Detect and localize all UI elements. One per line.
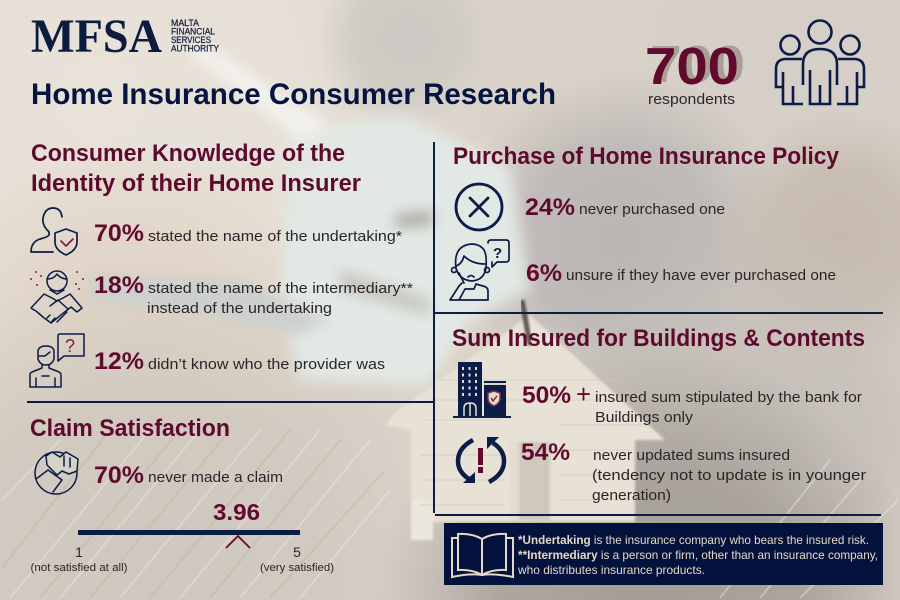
definitions text [517, 533, 878, 577]
scale low label [30, 544, 128, 574]
stat: 70% no claim: 70% [94, 462, 144, 489]
rating value: 3.96 [213, 499, 260, 525]
stat: 50% +: insured sum stipulated by the bank for [595, 389, 862, 406]
stat: 700 respondents: respondents [648, 91, 735, 108]
icon: handshake [31, 271, 82, 323]
icon: three people [776, 20, 864, 104]
stat: 54%: (tendency not to update is in younger [592, 467, 866, 484]
stat: 18%: 18% [94, 272, 144, 299]
heading: sum insured: Sum Insured for Buildings & Contents [452, 325, 865, 352]
heading: claim satisfaction: Claim Satisfaction [30, 415, 230, 442]
panel dividers [27, 142, 883, 516]
stat: 24%: 24% [525, 194, 575, 221]
scale marker [226, 536, 250, 548]
stat: 54%: never updated sums insured [593, 447, 790, 464]
panel: definitions [444, 523, 883, 585]
logo subtitle [171, 18, 219, 53]
icon: alert with circular arrows [458, 437, 504, 483]
stat: 70% [94, 220, 402, 247]
definitions text: *Undertaking is the insurance company who bears the insured risk. [518, 533, 869, 547]
stat: 700 respondents: 700 [650, 36, 745, 94]
stat: 12%: 12% [94, 348, 144, 375]
logo subtitle: FINANCIAL [171, 26, 215, 36]
icon: cross in circle [456, 184, 502, 230]
heading: consumer knowledge: Identity of their Home Insurer [31, 170, 361, 197]
scale high label: 5 [293, 544, 301, 560]
scale bar [78, 530, 300, 535]
stat: 700 respondents [645, 36, 745, 108]
logo subtitle: AUTHORITY [171, 43, 219, 53]
stat: 24%: never purchased one [579, 201, 725, 218]
stat: 24% [525, 194, 725, 221]
panel: purchase of policy [450, 143, 840, 300]
stat: 18%: instead of the undertaking [147, 300, 332, 317]
stat: 54%: 54% [521, 439, 570, 466]
icon: hands in circle [35, 452, 78, 494]
heading: consumer knowledge [31, 140, 361, 197]
stat: 50% +: 50% [522, 382, 571, 409]
logo subtitle: MALTA [171, 18, 199, 28]
stat: 70% no claim [94, 462, 283, 489]
logo: MFSA: MFSA [31, 10, 162, 63]
stat: 12%: didn’t know who the provider was [148, 356, 385, 373]
heading: consumer knowledge: Consumer Knowledge of the [31, 140, 345, 167]
scale low label: 1 [75, 544, 83, 560]
stat: 12% [94, 348, 385, 375]
stat: 70% no claim: never made a claim [148, 469, 283, 486]
title: Home Insurance Consumer Research [31, 78, 556, 111]
scale high label [260, 544, 334, 574]
stat: 6%: 6% [526, 260, 562, 287]
icon: confused person [450, 240, 509, 300]
stat: 50% +: + [576, 379, 591, 409]
stat: 6% [526, 260, 836, 287]
icon: person with question: ? [65, 336, 75, 356]
panel: claim satisfaction [30, 415, 334, 574]
icon: person with shield [31, 208, 77, 255]
stat: 50% +: Buildings only [595, 409, 694, 426]
decorative dots around handshake [30, 271, 84, 290]
icon: confused person: ? [493, 245, 502, 262]
stat: 6%: unsure if they have ever purchased one [566, 267, 836, 284]
stat: 18%: stated the name of the intermediary** [148, 280, 413, 297]
stat: 50% + [522, 379, 862, 426]
rating scale chart [30, 499, 334, 574]
icon: bank building with shield [453, 362, 511, 418]
icon: open book [452, 534, 513, 577]
panel: consumer knowledge [30, 140, 413, 387]
stat: 70%: 70% [94, 220, 144, 247]
stat: 54%: generation) [592, 487, 671, 504]
scale high label: (very satisfied) [260, 562, 334, 574]
panel: sum insured [452, 325, 866, 504]
stat: 54% [521, 439, 866, 504]
scale low label: (not satisfied at all) [30, 562, 128, 574]
stat: 18% [94, 272, 413, 317]
logo subtitle: SERVICES [171, 35, 211, 45]
stat: 700 respondents: 700 [645, 38, 739, 96]
stat: 70%: stated the name of the undertaking* [148, 228, 402, 245]
icon: person with question [30, 334, 84, 387]
heading: purchase: Purchase of Home Insurance Policy [453, 143, 840, 170]
definitions text: who distributes insurance products. [517, 563, 705, 577]
definitions text: **Intermediary is a person or firm, other than an insurance company, [518, 548, 878, 562]
